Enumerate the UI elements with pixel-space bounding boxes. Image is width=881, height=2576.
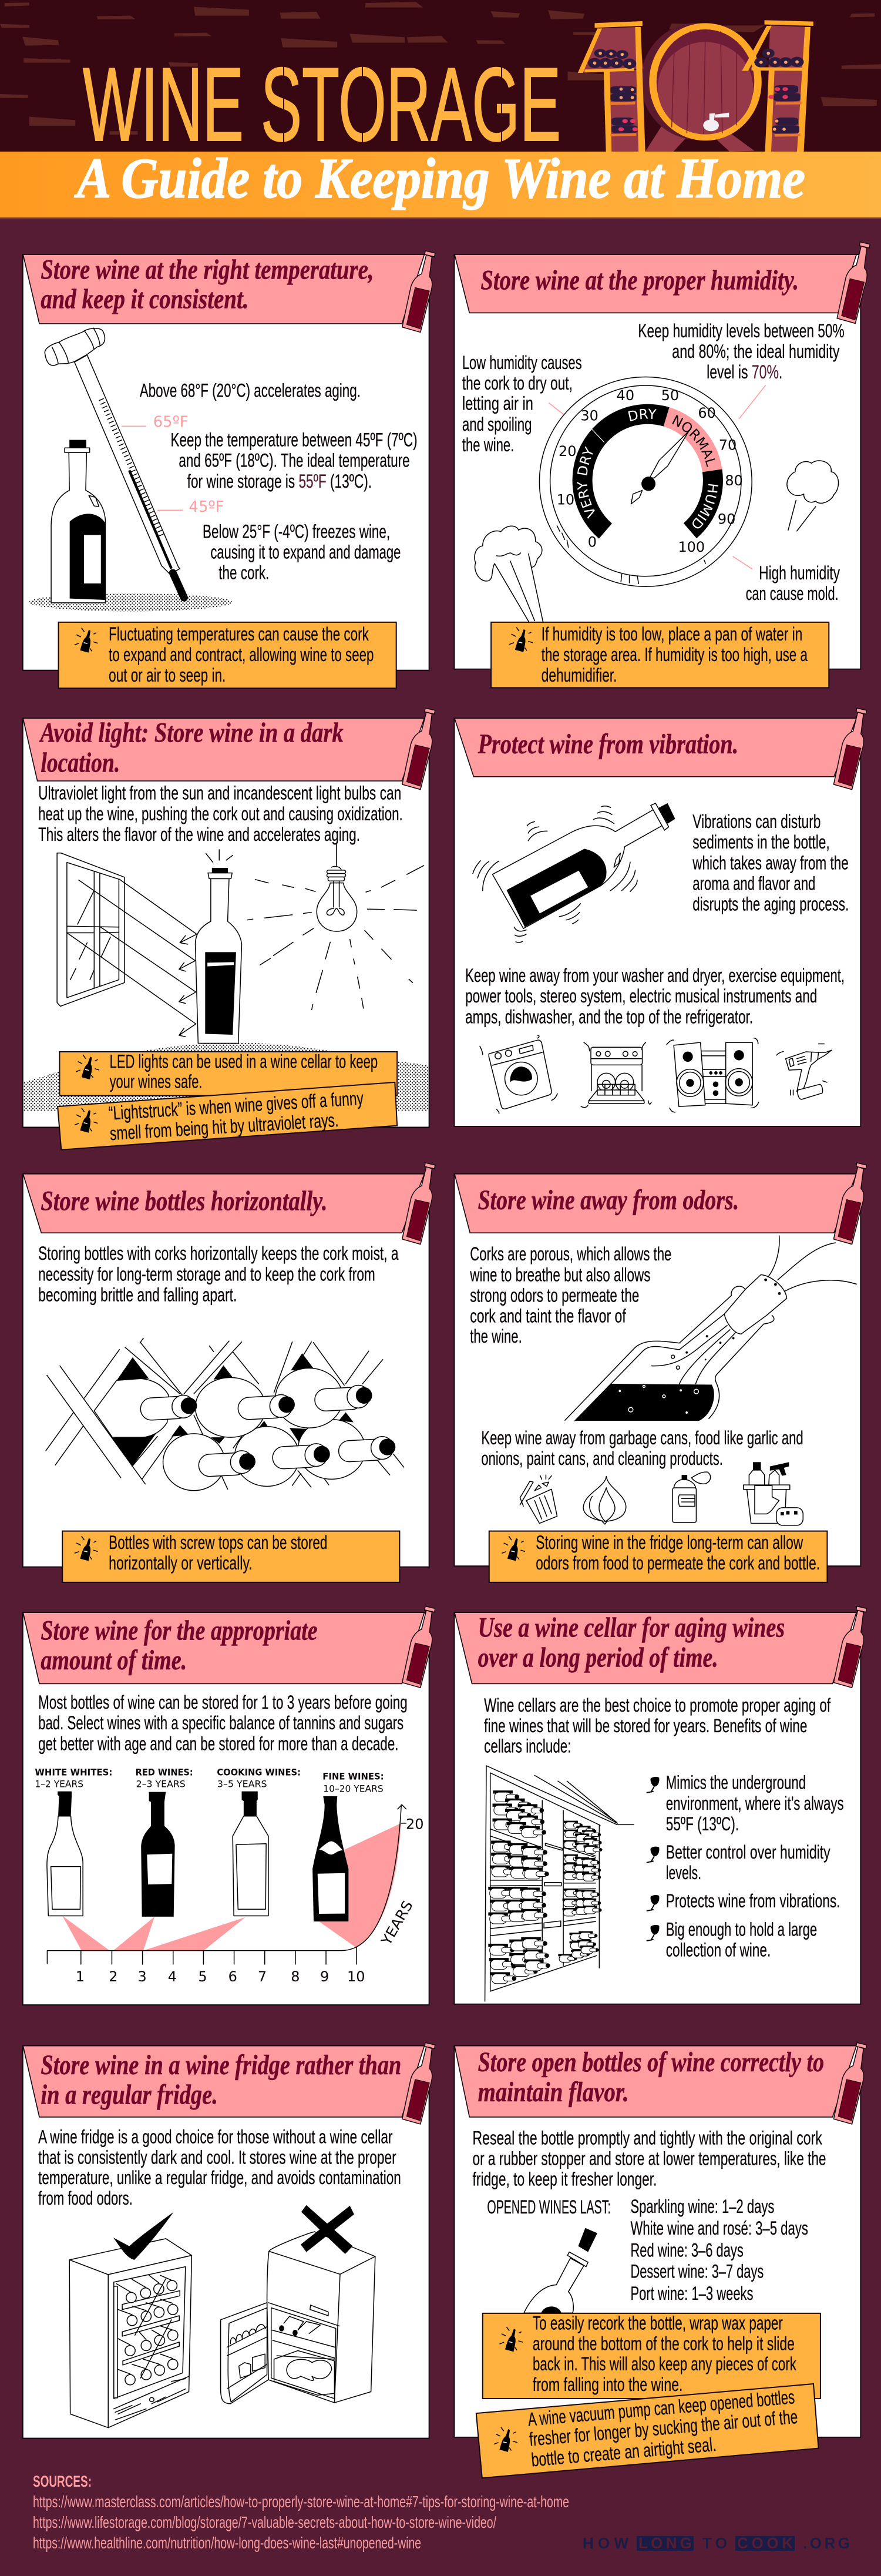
- heading: [478, 2047, 824, 2108]
- chart: years axis: 20: [406, 1816, 423, 1833]
- chart: years axis: 10: [347, 1968, 365, 1985]
- humidity gauge: 50: [661, 387, 679, 404]
- text: vibrations: sediments in the bottle,: [692, 831, 830, 853]
- chart: years axis: 9: [320, 1968, 329, 1985]
- heading banner: Store wine for the appropriate: [41, 1615, 318, 1646]
- humidity gauge: 90: [718, 511, 735, 528]
- text: most bottles: Most bottles of wine can be stored for 1 to 3 years before going: [38, 1692, 408, 1713]
- header: cellar background: [0, 0, 881, 153]
- icon: bottle: [51, 440, 105, 603]
- heading banner shape: [455, 2046, 856, 2117]
- text: wine fridge: A wine fridge is a good choice for those without a wine cellar: [38, 2126, 393, 2147]
- icon: drill: [776, 1044, 832, 1099]
- temperature markers: 65ºF: [153, 413, 189, 431]
- text: storing bottles: Storing bottles with corks horizontally keeps the cork moist, a: [38, 1243, 399, 1264]
- list: benefits of wine cellars: [647, 1772, 844, 1960]
- sources: https://www.lifestorage.com/blog/storage/7-valuable-secrets-about-how-to-store-wine-video/: [33, 2513, 496, 2531]
- heading banner: Use a wine cellar for aging wines: [478, 1612, 785, 1643]
- subtitle band: A Guide to Keeping Wine at Home: [74, 147, 805, 210]
- chart: bottle labels: 2–3 YEARS: [136, 1778, 186, 1789]
- humidity gauge: VERY DRY: [577, 446, 595, 519]
- panel background: [454, 254, 860, 669]
- humidity gauge: DRY: [628, 409, 657, 421]
- chart: years axis: 8: [291, 1968, 300, 1985]
- icon: dry cloud left: [475, 526, 543, 622]
- barrel tap: [703, 113, 729, 131]
- icon: open bottle: [524, 2228, 597, 2313]
- text: wine fridge: that is consistently dark and cool. It stores wine at the proper: [38, 2146, 396, 2168]
- icon: header bottle: [833, 2042, 866, 2124]
- panel: light: [23, 708, 435, 1150]
- panel background: [454, 1612, 860, 2004]
- illustration: 101 barrel and bottle racks: [578, 20, 813, 152]
- text: wine fridge: temperature, unlike a regular fridge, and avoids contamination: [38, 2167, 401, 2188]
- logo: how long to cook: HOW: [583, 2534, 628, 2552]
- text: storing bottles: necessity for long-term storage and to keep the cork from: [38, 1263, 375, 1285]
- panel background: [454, 1174, 860, 1566]
- icon: regular fridge: [221, 2232, 375, 2404]
- humidity gauge: HUMID: [692, 484, 718, 529]
- callout 2 box: [476, 2384, 819, 2478]
- text: ultraviolet light: This alters the flavor of the wine and accelerates aging.: [38, 824, 360, 845]
- icon: header bottle: [402, 1163, 435, 1245]
- text layer: [38, 2042, 435, 2209]
- callout: [489, 1531, 827, 1582]
- list: opened wine durations: Sparkling wine: 1–2 days: [630, 2196, 774, 2217]
- icon: bottle in light: [196, 850, 242, 1044]
- panel shapes and fridge drawings: [23, 2046, 429, 2439]
- temperature markers: 45ºF: [189, 498, 224, 516]
- humidity gauge: 100: [678, 539, 705, 555]
- humidity gauge: 60: [698, 405, 716, 421]
- text: below 25F: Below 25°F (-4ºC) freezes wine,: [203, 521, 390, 542]
- heading banner: Protect wine from vibration.: [478, 729, 738, 760]
- icon: wine fridge: [69, 2239, 191, 2428]
- icon: garbage can: [520, 1475, 557, 1524]
- text: below 25F: [203, 521, 401, 583]
- heading banner: [23, 1174, 425, 1233]
- sources: https://www.healthline.com/nutrition/how-long-does-wine-last#unopened-wine: [33, 2534, 421, 2552]
- heading: maintain flavor.: [478, 2077, 629, 2108]
- bullet: mimics underground: [647, 1772, 844, 1834]
- icon: stereo: [667, 1038, 759, 1112]
- illustration: corked bottle with odors: [565, 1236, 856, 1421]
- text: most bottles: get better with age and can be stored for more than a decade.: [38, 1733, 399, 1754]
- heading banner: location.: [41, 747, 120, 779]
- icon: header bottle: [402, 708, 435, 790]
- chart: years axis: 4: [168, 1968, 177, 1985]
- logo: how long to cook: COOK: [737, 2534, 793, 2552]
- logo: how long to cook: [583, 2534, 850, 2552]
- heading: [41, 2050, 401, 2111]
- sources: https://www.masterclass.com/articles/how-to-properly-store-wine-at-home#7-tips-for-storing-wine-at-home: [33, 2493, 569, 2511]
- text: wine fridge: [38, 2126, 401, 2209]
- bullet: mimics underground: 55ºF (13ºC).: [666, 1813, 739, 1834]
- heading banner: Store wine away from odors.: [478, 1185, 739, 1216]
- chart: pink lifespan shapes: [62, 1823, 401, 1951]
- panel: odors: [454, 1163, 866, 1582]
- chart: bottle labels: COOKING WINES:: [217, 1766, 301, 1778]
- heading banner: Store wine bottles horizontally.: [41, 1186, 327, 1216]
- callout: lightstruck: [58, 1082, 397, 1150]
- chart: years axis: 3: [138, 1968, 147, 1985]
- bullet: large collection: [647, 1918, 817, 1960]
- icon: dishwasher: [581, 1042, 651, 1108]
- callout 1 box: [483, 2313, 821, 2399]
- callout: recork text: To easily recork the bottle, wrap wax paper: [533, 2312, 783, 2333]
- humidity gauge: 10: [557, 492, 574, 508]
- text: low humidity: and spoiling: [462, 414, 532, 435]
- chart: years axis: [47, 1804, 423, 1985]
- chart: bottle labels: 10–20 YEARS: [323, 1783, 384, 1795]
- text: storing bottles: becoming brittle and falling apart.: [38, 1284, 237, 1306]
- dotted shadow: [24, 1042, 429, 1111]
- icon: x mark: [301, 2205, 354, 2254]
- icon: red wine bottle: [141, 1792, 175, 1917]
- text: corks are porous: Corks are porous, which allows the: [470, 1243, 671, 1264]
- heading banner: [455, 1612, 856, 1683]
- list: opened wine durations: Red wine: 3–6 days: [630, 2239, 744, 2260]
- panel: wine cellar: [454, 1606, 866, 2004]
- text: vibrations: [692, 811, 849, 915]
- heading: in a regular fridge.: [41, 2079, 218, 2111]
- sources: SOURCES:: [33, 2473, 92, 2490]
- text: above 68F: Above 68°F (20°C) accelerates aging.: [140, 380, 361, 401]
- text layer: [473, 2042, 866, 2471]
- text: low humidity: letting air in: [462, 393, 533, 414]
- barrel legs: [645, 123, 754, 152]
- text: below 25F: causing it to expand and damage: [210, 542, 401, 563]
- chart: years axis: 6: [228, 1968, 237, 1985]
- text: corks are porous: cork and taint the flavor of: [470, 1305, 626, 1326]
- callout: vacuum pump text: bottle to create an airtight seal.: [530, 2434, 717, 2471]
- text: high humidity: [746, 562, 840, 604]
- left rack: [578, 21, 645, 152]
- callout: Bottles with screw tops can be stored: [109, 1532, 327, 1553]
- panel: humidity: [453, 242, 870, 689]
- callout: LED lights: [59, 1051, 397, 1096]
- panel: open bottles: [454, 2042, 866, 2478]
- heading banner: [23, 717, 425, 781]
- text: keep wine away: amps, dishwasher, and the top of the refrigerator.: [465, 1006, 753, 1028]
- callout: recork text: [499, 2312, 796, 2395]
- list: opened wine durations: White wine and rosé: 3–5 days: [630, 2218, 808, 2239]
- chart: bottle labels: 3–5 YEARS: [217, 1778, 267, 1789]
- chart: years axis: 5: [198, 1968, 207, 1985]
- chart: bottle labels: FINE WINES:: [322, 1771, 384, 1782]
- illustration: bottle rack: [46, 1338, 404, 1491]
- callout: [62, 1531, 399, 1582]
- icon: check mark: [113, 2212, 174, 2260]
- list: opened wine durations: Port wine: 1–3 weeks: [630, 2283, 754, 2304]
- chart: years axis: 7: [258, 1968, 267, 1985]
- bullet: humidity control: levels.: [666, 1862, 701, 1883]
- humidity gauge: 30: [580, 408, 598, 424]
- callout: out or air to seep in.: [109, 665, 226, 686]
- callout: LED lights: LED lights can be used in a wine cellar to keep: [110, 1051, 378, 1072]
- text: low humidity: the wine.: [462, 434, 514, 455]
- panel: wine fridge: [23, 2042, 435, 2439]
- humidity gauge: 80: [725, 472, 743, 489]
- panel background: [23, 1612, 429, 2005]
- text: ultraviolet light: Ultraviolet light from the sun and incandescent light bulbs can: [38, 782, 401, 804]
- callout: recork text: from falling into the wine.: [533, 2374, 682, 2395]
- text: corks are porous: wine to breathe but also allows: [470, 1264, 650, 1286]
- icon: header bottle: [833, 708, 866, 790]
- heading banner: [23, 1612, 425, 1683]
- logo: how long to cook: LONG: [638, 2534, 692, 2552]
- chart: years axis: YEARS: [378, 1898, 416, 1948]
- panel background: [23, 254, 429, 670]
- humidity gauge: 0: [588, 534, 597, 550]
- text: high humidity: High humidity: [759, 562, 840, 583]
- callout: [59, 622, 396, 688]
- icon: fine wine bottle: [312, 1796, 348, 1921]
- humidity gauge: NORMAL: [672, 415, 715, 467]
- text: most bottles: bad. Select wines with a specific balance of tannins and sugars: [38, 1712, 403, 1733]
- icon: cooking wine bottle: [233, 1792, 268, 1916]
- icon: header bottle: [402, 2042, 435, 2124]
- heading banner: [23, 254, 425, 324]
- text: corks are porous: [470, 1243, 671, 1347]
- text: vibrations: aroma and flavor and: [692, 873, 815, 894]
- text: ideal temperature: for wine storage is 55ºF (13ºC).: [187, 471, 372, 492]
- leader lines: [549, 385, 766, 569]
- icon: header bottle: [402, 251, 435, 332]
- bullet: humidity control: [647, 1842, 830, 1883]
- heading banner: and keep it consistent.: [41, 284, 248, 315]
- panel background: [23, 718, 429, 1128]
- chart: bottle labels: 1–2 YEARS: [35, 1778, 83, 1789]
- list: opened wine durations: Dessert wine: 3–7 days: [630, 2260, 764, 2282]
- icon: window: [57, 853, 197, 1037]
- bullet: mimics underground: Mimics the underground: [666, 1772, 806, 1793]
- text: vibrations: Vibrations can disturb: [692, 811, 821, 832]
- icon: spray can: [672, 1472, 711, 1522]
- dotted shadow: [29, 593, 233, 611]
- text: ideal temperature: and 65ºF (18ºC). The ideal temperature: [179, 450, 410, 471]
- bullet: large collection: collection of wine.: [666, 1939, 771, 1960]
- text: ultraviolet light: heat up the wine, pushing the cork out and causing oxidization.: [38, 803, 403, 824]
- text: corks are porous: strong odors to permeate the: [470, 1284, 639, 1306]
- humidity gauge: 40: [617, 387, 634, 404]
- heading banner: Avoid light: Store wine in a dark: [39, 717, 344, 749]
- icon: header bottle: [402, 1606, 435, 1688]
- callout: dehumidifier.: [542, 665, 617, 686]
- text: high humidity: can cause mold.: [746, 583, 839, 604]
- panel background: [454, 2046, 860, 2437]
- chart: years axis: 2: [109, 1968, 117, 1985]
- icon: mold cloud right: [787, 461, 839, 531]
- title: wine storage: WINE STORAGE: [83, 46, 561, 163]
- heading banner shape: [23, 2046, 425, 2117]
- text: reseal: [473, 2127, 826, 2190]
- chart: bottle labels: WHITE WHITES:: [35, 1766, 112, 1778]
- panel: horizontal storage: [23, 1163, 435, 1582]
- chart: bottle labels: RED WINES:: [136, 1766, 193, 1778]
- label: opened wines last: OPENED WINES LAST:: [487, 2196, 611, 2218]
- callout: [491, 622, 829, 687]
- icon: white wine bottle: [47, 1792, 83, 1916]
- text: wine cellars: cellars include:: [484, 1736, 571, 1757]
- callout: to expand and contract, allowing wine to seep: [109, 644, 374, 665]
- text: ideal humidity: [638, 320, 845, 383]
- illustration: wine cellar racks: [485, 1766, 634, 2001]
- heading banner: over a long period of time.: [478, 1642, 718, 1673]
- icon: header bottle: [833, 1606, 866, 1688]
- panel: appropriate time: [23, 1606, 435, 2005]
- text: keep wine away: [465, 965, 845, 1028]
- text: wine fridge: from food odors.: [38, 2188, 133, 2209]
- panel background: [23, 2046, 429, 2439]
- text: ideal temperature: [170, 429, 418, 492]
- heading banner: [455, 718, 856, 777]
- humidity gauge: 70: [719, 437, 737, 454]
- callout: lightstruck: “Lightstruck” is when wine gives off a funny: [108, 1088, 364, 1124]
- text: reseal: fridge, to keep it fresher longer.: [473, 2168, 657, 2190]
- callout: Fluctuating temperatures can cause the cork: [109, 623, 369, 645]
- heading banner: [455, 1174, 856, 1233]
- heading: Store wine in a wine fridge rather than: [41, 2050, 401, 2081]
- humidity gauge: [539, 376, 752, 587]
- text: ideal temperature: Keep the temperature between 45ºF (7ºC): [170, 429, 418, 450]
- sources: [33, 2473, 569, 2552]
- icon: header bottle: [833, 1163, 866, 1245]
- icon: washing machine: [480, 1035, 557, 1113]
- heading banner: amount of time.: [41, 1645, 187, 1676]
- text: ultraviolet light: [38, 782, 403, 845]
- list: opened wine durations: [630, 2196, 808, 2304]
- icon: garlic: [583, 1477, 626, 1524]
- logo: how long to cook: .ORG: [803, 2534, 850, 2552]
- callout: lightstruck: smell from being hit by ultraviolet rays.: [109, 1109, 339, 1144]
- thermometer: [45, 328, 184, 598]
- rack bottles: [94, 1368, 395, 1491]
- text: corks are porous: the wine.: [470, 1326, 522, 1347]
- text: ideal humidity: level is 70%.: [707, 361, 782, 383]
- panel shapes: [454, 2046, 860, 2478]
- text: wine cellars: [484, 1695, 830, 1757]
- icon: cleaning bucket: [744, 1462, 803, 1525]
- panel: temperature: [23, 251, 435, 688]
- callout: LED lights: your wines safe.: [110, 1071, 203, 1092]
- chart: years axis: 1: [76, 1968, 85, 1985]
- panel background: [23, 1174, 429, 1567]
- heading banner: Store wine at the proper humidity.: [480, 265, 799, 296]
- text: low humidity: [462, 352, 582, 455]
- text: most bottles: [38, 1692, 408, 1754]
- chart: bottle labels: [35, 1766, 384, 1795]
- logo: how long to cook: TO: [702, 2534, 727, 2552]
- callout: horizontally or vertically.: [109, 1552, 253, 1574]
- humidity gauge: 20: [559, 443, 577, 459]
- text: storing bottles: [38, 1243, 399, 1306]
- text: keep wine away: [481, 1427, 803, 1469]
- icon: header bottle: [837, 242, 870, 323]
- heading banner: [455, 254, 856, 313]
- bullet: large collection: Big enough to hold a large: [666, 1918, 817, 1940]
- text: low humidity: Low humidity causes: [462, 352, 582, 373]
- icon: light bulb: [247, 843, 424, 1009]
- callout: vacuum pump text: [494, 2386, 799, 2471]
- right rack: [742, 20, 813, 152]
- barrel: [641, 23, 762, 140]
- temperature markers: [122, 413, 224, 516]
- text: keep wine away: onions, paint cans, and cleaning products.: [481, 1448, 723, 1469]
- text: below 25F: the cork.: [218, 562, 269, 583]
- panel: vibration: [454, 708, 866, 1126]
- heading banner: Store wine at the right temperature,: [41, 254, 374, 285]
- panel background: [454, 718, 860, 1126]
- icon: vibrating bottle: [473, 803, 675, 942]
- text: low humidity: the cork to dry out,: [462, 373, 573, 394]
